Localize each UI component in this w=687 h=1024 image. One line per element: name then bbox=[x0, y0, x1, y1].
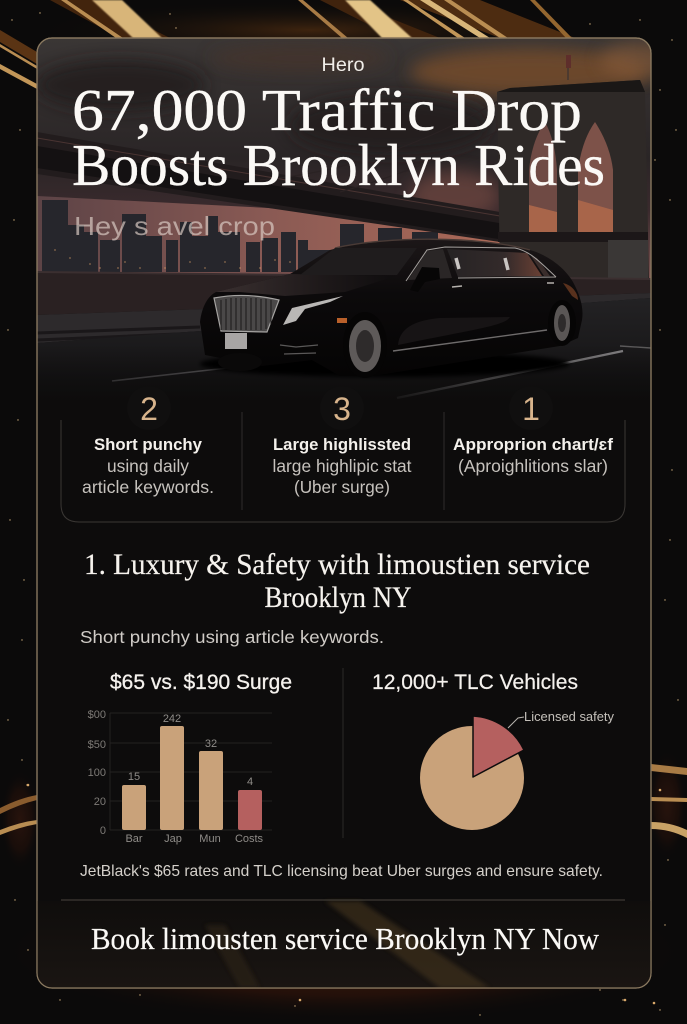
chart heading: $65 vs. $190 Surge bbox=[110, 671, 292, 694]
panel: pie chart bbox=[372, 671, 615, 830]
section heading: Brooklyn NY bbox=[264, 581, 412, 614]
section heading bbox=[84, 548, 590, 614]
call to action band bbox=[37, 900, 651, 988]
bar chart bbox=[88, 709, 272, 845]
bar chart: 4 bbox=[247, 776, 253, 788]
section intro text: Short punchy using article keywords. bbox=[80, 627, 384, 647]
hero label: Hero bbox=[322, 55, 364, 76]
point 3: large highlipic stat bbox=[272, 456, 412, 476]
hero title: 67,000 Traffic Drop bbox=[72, 77, 582, 143]
bar chart: $50 bbox=[88, 739, 106, 751]
point 3 bbox=[272, 386, 412, 497]
hero title bbox=[72, 77, 605, 198]
bar chart: 15 bbox=[128, 771, 140, 783]
panel: key points bbox=[61, 386, 625, 522]
point 2 bbox=[82, 386, 214, 497]
point 2: using daily bbox=[107, 456, 189, 476]
point 1: 1 bbox=[522, 391, 540, 427]
bar chart: 32 bbox=[205, 738, 217, 750]
point 3: Large highlissted bbox=[273, 435, 411, 454]
hero photo: bridge at dusk with limousine bbox=[35, 38, 680, 403]
bar chart: 100 bbox=[88, 767, 106, 779]
point 1: Approprion chart/ɛf bbox=[453, 435, 613, 454]
hero subtitle: Hey s avel crop bbox=[74, 211, 275, 241]
pie chart bbox=[420, 710, 615, 830]
limousine bbox=[200, 239, 583, 378]
point 2: 2 bbox=[140, 391, 158, 427]
bar chart: 242 bbox=[163, 713, 181, 725]
bar chart: Mun bbox=[199, 833, 221, 845]
bar chart: Jap bbox=[164, 833, 182, 845]
bar chart: Bar bbox=[125, 833, 143, 845]
point 1: (Aproighlitions slar) bbox=[458, 456, 608, 476]
bar chart: Costs bbox=[235, 833, 264, 845]
pie chart: Licensed safety bbox=[524, 710, 615, 724]
summary text: JetBlack's $65 rates and TLC licensing beat Uber surges and ensure safety. bbox=[80, 863, 603, 880]
bar chart: 0 bbox=[100, 825, 106, 837]
point 2: article keywords. bbox=[82, 477, 214, 497]
section heading: 1. Luxury & Safety with limoustien service bbox=[84, 548, 590, 581]
bar chart: $00 bbox=[88, 709, 106, 721]
point 2: Short punchy bbox=[94, 435, 203, 454]
chart heading: 12,000+ TLC Vehicles bbox=[372, 671, 578, 694]
point 1 bbox=[453, 386, 613, 476]
bar chart: 20 bbox=[94, 796, 106, 808]
point 3: 3 bbox=[333, 391, 351, 427]
point 3: (Uber surge) bbox=[294, 477, 390, 497]
call to action text: Book limousten service Brooklyn NY Now bbox=[91, 921, 600, 956]
panel: bar chart bbox=[88, 671, 292, 845]
hero title: Boosts Brooklyn Rides bbox=[72, 132, 605, 198]
